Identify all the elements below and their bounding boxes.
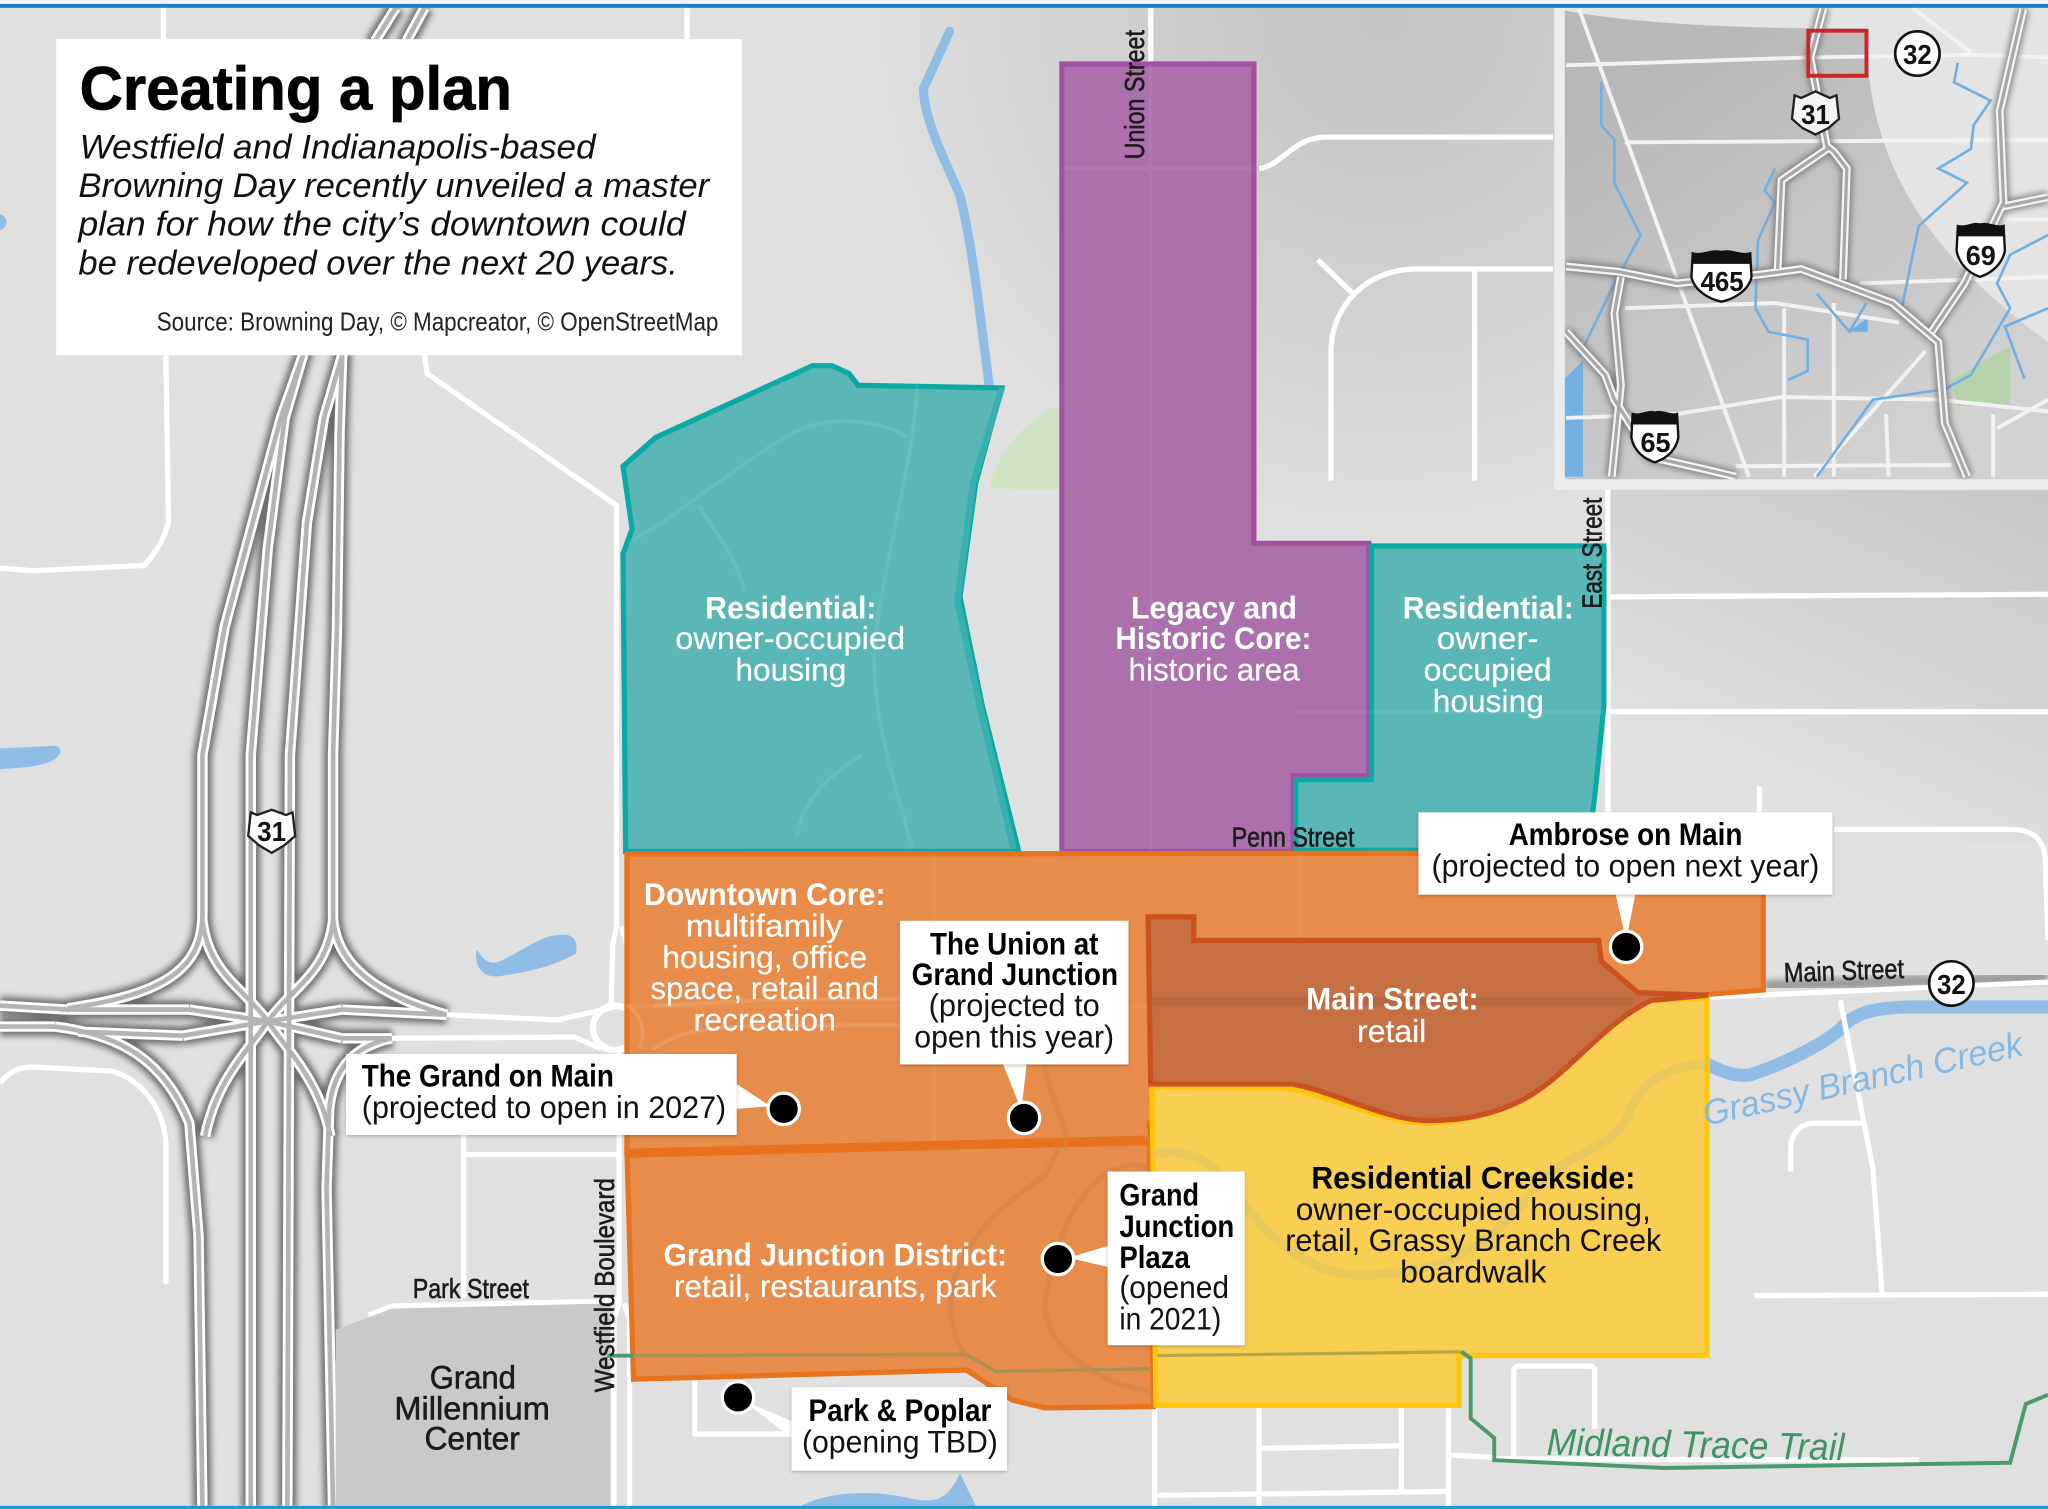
callout: Grand Junction Plaza: (opened [1119, 1270, 1229, 1305]
source line: Source: Browning Day, © Mapcreator, © OpenStreetMap [157, 306, 718, 336]
zone: residential west: housing [735, 652, 846, 687]
intro text: Browning Day recently unveiled a master [78, 167, 711, 205]
red locator box [1808, 31, 1866, 76]
zone: main street: retail [1357, 1014, 1426, 1049]
inset shield: US 31 [1792, 91, 1839, 135]
callout: The Union at Grand Junction [900, 921, 1128, 1134]
callout: Grand Junction Plaza: Grand [1119, 1177, 1199, 1212]
title panel [56, 39, 742, 355]
heading: Creating a plan [80, 55, 512, 124]
inset locator map [1554, 8, 2048, 490]
callout: Park and Poplar: Park & Poplar [808, 1393, 991, 1428]
callout: The Union at Grand Junction: (projected to [929, 988, 1100, 1023]
zone: residential creekside [1152, 998, 1707, 1405]
zone: residential creekside: boardwalk [1400, 1255, 1547, 1290]
zone: grand junction district: retail, restaurants, park [674, 1269, 997, 1304]
zone: downtown core: space, retail and [650, 971, 879, 1006]
callout: The Union at Grand Junction: The Union at [930, 927, 1099, 962]
shield: route 32 on Main Street: 32 [1937, 969, 1966, 1000]
inset shield: I-69 [1957, 224, 2005, 277]
zone: residential east: occupied [1424, 652, 1552, 687]
intro text: plan for how the city’s downtown could [77, 206, 688, 244]
inset shield: I-65: 65 [1640, 427, 1671, 458]
label: Midland Trace Trail: Midland Trace Trail [1546, 1422, 1846, 1469]
intro text: be redeveloped over the next 20 years. [78, 244, 678, 282]
callout: Ambrose on Main [1418, 812, 1832, 963]
zone: residential west [623, 366, 1019, 852]
zone: legacy and historic core: historic area [1128, 652, 1300, 687]
zone: residential east: Residential: [1403, 590, 1574, 625]
shield: US 31 on map [248, 810, 295, 853]
label: Grassy Branch Creek: Grassy Branch Creek [1699, 1024, 2029, 1134]
label: East Street: East Street [1576, 497, 1607, 609]
inset shield: US 31: 31 [1801, 99, 1830, 130]
callout: Grand Junction Plaza [1042, 1172, 1245, 1345]
Grand Millennium Center block: Grand [430, 1358, 516, 1395]
zone: downtown core: Downtown Core: [644, 877, 886, 912]
callout: The Grand on Main [346, 1054, 799, 1135]
zone: residential east: housing [1433, 684, 1544, 719]
zone: residential west: owner-occupied [675, 621, 905, 656]
zone: downtown core: recreation [694, 1002, 836, 1037]
callout: The Union at Grand Junction: Grand Junction [912, 957, 1118, 992]
Grand Millennium Center block: Millennium [394, 1390, 550, 1427]
zone: residential east [1296, 546, 1604, 850]
zone: residential creekside: Residential Creekside: [1311, 1160, 1635, 1195]
shield: route 32 on Main Street [1929, 961, 1974, 1006]
highway interchange: US 31 and Main Street [0, 8, 637, 1508]
intro text [77, 129, 711, 282]
callout: Grand Junction Plaza: Junction [1119, 1209, 1234, 1244]
callout: Park and Poplar [722, 1382, 1007, 1471]
callout: Ambrose on Main: Ambrose on Main [1509, 817, 1742, 852]
inset shield: I-69: 69 [1966, 240, 1996, 271]
label: Penn Street: Penn Street [1232, 821, 1355, 852]
inset shield: I-465 [1691, 251, 1752, 302]
shield: US 31 on map: 31 [257, 816, 286, 847]
inset shield: I-65 [1631, 412, 1678, 462]
callout: The Grand on Main: The Grand on Main [362, 1059, 614, 1094]
callout: Grand Junction Plaza: Plaza [1119, 1240, 1190, 1275]
callout: The Union at Grand Junction: open this year) [914, 1019, 1114, 1054]
zone: downtown core [627, 853, 1763, 1153]
zone: grand junction district [627, 1136, 1153, 1408]
inset shield: I-465: 465 [1701, 266, 1744, 297]
zone: legacy and historic core: Legacy and [1131, 590, 1297, 625]
inset shield: route 32 [1895, 31, 1940, 76]
zone: residential west: Residential: [705, 590, 876, 625]
zone: residential east: owner- [1437, 621, 1539, 656]
zone: downtown core: multifamily [686, 908, 843, 943]
callout: The Grand on Main: (projected to open in 2027) [362, 1090, 726, 1125]
label: Park Street: Park Street [413, 1273, 529, 1304]
Grand Millennium Center block: Center [424, 1420, 520, 1457]
Midland Trace Trail line [607, 1352, 2048, 1468]
zone: legacy and historic core [1062, 64, 1369, 852]
inset shield: route 32: 32 [1903, 39, 1932, 70]
intro text: Westfield and Indianapolis-based [80, 129, 597, 167]
Grand Millennium Center block [336, 1303, 610, 1508]
zone: legacy and historic core: Historic Core: [1115, 621, 1311, 656]
zone: main street: Main Street: [1306, 982, 1479, 1017]
callout: Ambrose on Main: (projected to open next year) [1432, 848, 1819, 883]
zone: main street [1148, 917, 1708, 1121]
zone: grand junction district: Grand Junction District: [664, 1238, 1007, 1273]
label: Union Street: Union Street [1119, 30, 1150, 159]
label: Westfield Boulevard: Westfield Boulevard [589, 1178, 620, 1392]
zone: downtown core: housing, office [662, 940, 867, 975]
park patch [989, 405, 1061, 490]
callout: Grand Junction Plaza: in 2021) [1119, 1302, 1221, 1337]
callout: Park and Poplar: (opening TBD) [802, 1424, 998, 1459]
zone: residential creekside: owner-occupied housing, [1296, 1192, 1651, 1227]
label: Main Street: Main Street [1783, 953, 1905, 988]
zone: residential creekside: retail, Grassy Branch Creek [1285, 1223, 1662, 1258]
